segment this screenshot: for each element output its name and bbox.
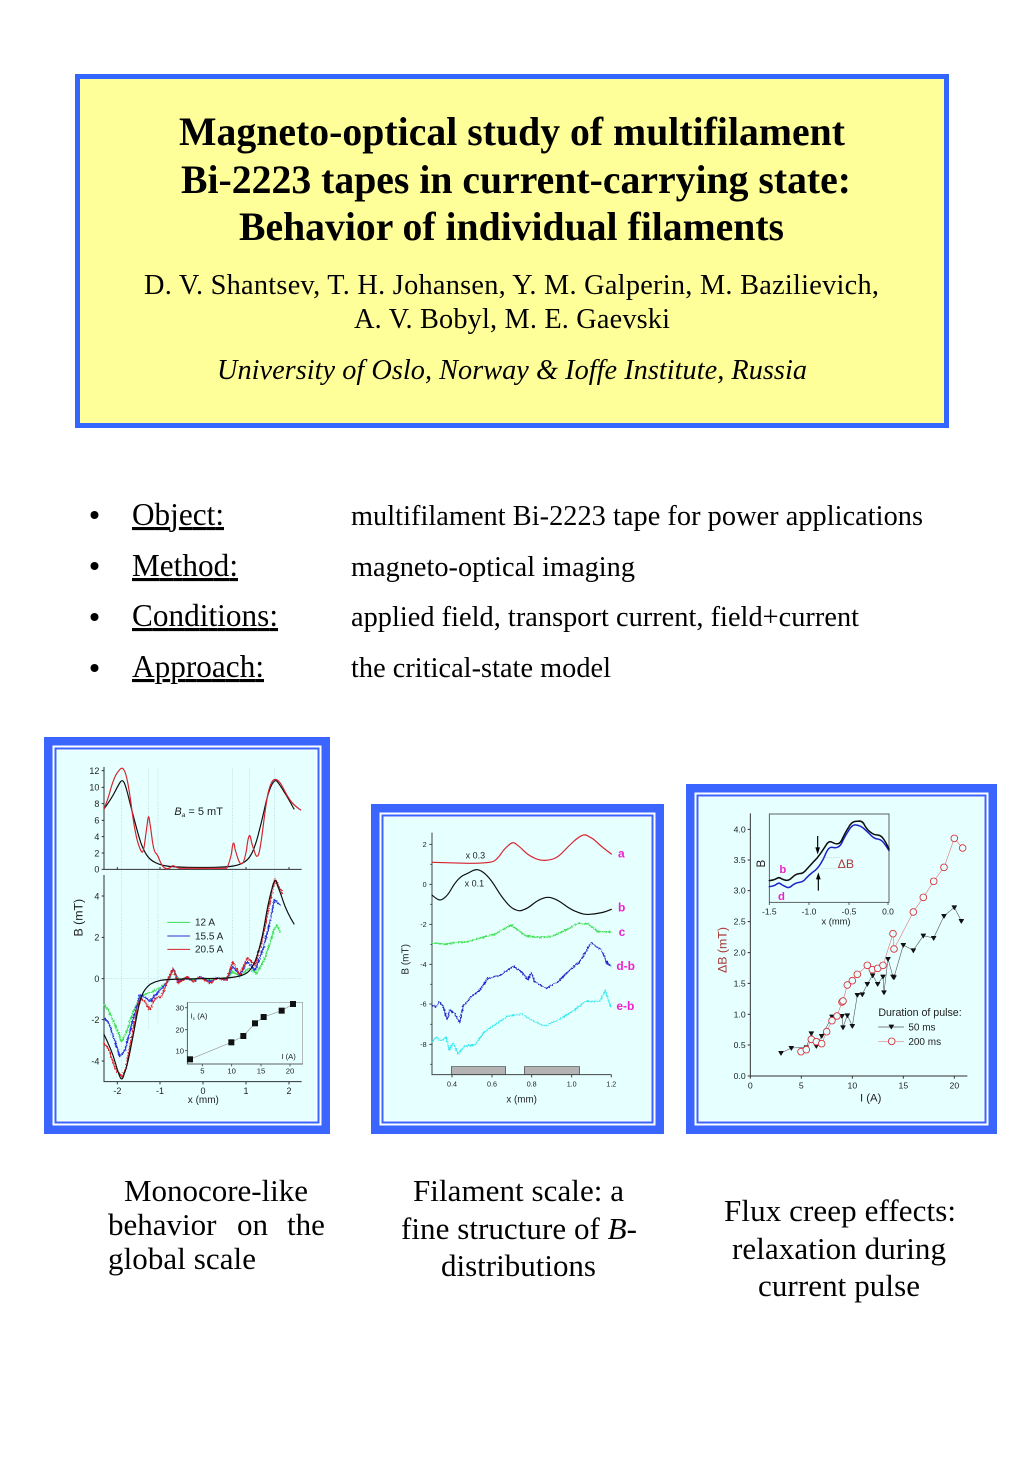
axis titles: x (mm): [506, 1094, 537, 1105]
chart: 15: [899, 1080, 908, 1090]
inset chart: 5: [200, 1066, 204, 1075]
title: [179, 110, 851, 249]
tick labels: 10: [89, 783, 99, 793]
applied field label: a: [182, 812, 186, 819]
scale labels: [465, 851, 485, 888]
legend: 12 A: [195, 918, 215, 929]
chart: 5: [799, 1080, 804, 1090]
inset chart: x (mm): [821, 916, 851, 926]
authors: D. V. Shantsev, T. H. Johansen, Y. M. Galperin, M. Bazilievich,: [144, 270, 879, 301]
top curves: [104, 768, 301, 869]
panel: flux creep chart: [686, 784, 997, 1134]
bullet: approach: the critical-state model: [351, 653, 611, 684]
bullet: object: [90, 497, 923, 532]
inset chart: -1.0: [802, 906, 817, 916]
title: Bi-2223 tapes in current-carrying state:: [181, 158, 851, 202]
curve c: [432, 923, 611, 944]
tick labels: -6: [420, 1001, 427, 1009]
guide lines: [104, 768, 302, 1082]
chart: 2: [286, 1086, 291, 1096]
tick labels: 0.5: [734, 1040, 746, 1050]
authors: [144, 270, 879, 335]
tick labels: 0: [94, 865, 99, 875]
tick labels: 2: [423, 841, 427, 849]
curve a: [432, 835, 611, 863]
bullet list: [90, 497, 923, 684]
caption: filament scale: distributions: [441, 1248, 596, 1283]
panel: global scale chart: [44, 737, 330, 1134]
axis titles: I (A): [860, 1092, 882, 1104]
inset chart: 10: [175, 1047, 184, 1056]
inset chart: [755, 814, 894, 926]
tick labels: 4.0: [734, 824, 746, 834]
tick labels: -8: [420, 1041, 427, 1049]
curve labels: e-b: [616, 999, 634, 1013]
bullet: method: magneto-optical imaging: [351, 552, 635, 583]
legend: [167, 918, 224, 956]
curve labels: b: [618, 900, 625, 914]
axes: [102, 767, 302, 1084]
tick labels: -2: [420, 921, 427, 929]
title box: [78, 76, 946, 426]
arrows: [815, 836, 821, 891]
scale labels: x 0.1: [465, 878, 484, 888]
tick labels: -4: [91, 1056, 99, 1066]
caption: monocore-like: [108, 1173, 325, 1276]
gray filament bars: [451, 1067, 580, 1075]
title: Magneto-optical study of multifilament: [179, 110, 846, 154]
panel frame: [371, 804, 664, 1134]
legend: 15.5 A: [195, 931, 224, 942]
inset chart: [175, 1001, 303, 1075]
tick labels: 3.0: [734, 886, 746, 896]
inset chart: B: [755, 860, 768, 868]
inset chart: I: [191, 1012, 193, 1021]
bullet: conditions: Conditions:: [132, 598, 278, 633]
authors: A. V. Bobyl, M. E. Gaevski: [354, 304, 670, 335]
tick labels: 1.5: [734, 978, 746, 988]
curve d-b: [432, 943, 611, 1023]
caption: flux creep: current pulse: [758, 1268, 920, 1303]
tick labels: 0.0: [734, 1071, 746, 1081]
inset chart: 0.0: [882, 906, 894, 916]
tick labels: 3.5: [734, 855, 746, 865]
caption: monocore-like: on: [237, 1207, 268, 1242]
panel: filament scale chart: [371, 804, 664, 1134]
tick labels: 2.0: [734, 948, 746, 958]
series: 50 ms: [779, 906, 964, 1055]
caption: monocore-like: Monocore-like: [124, 1173, 308, 1208]
tick labels: 2: [94, 848, 99, 858]
inset chart: d: [778, 891, 785, 903]
chart: -2: [113, 1086, 121, 1096]
caption: monocore-like: the: [287, 1207, 325, 1242]
chart: -1: [156, 1086, 164, 1096]
inset chart: 30: [175, 1004, 184, 1013]
legend: 200 ms: [908, 1037, 941, 1048]
caption: monocore-like: global scale: [108, 1241, 256, 1276]
bullet: conditions: [90, 598, 859, 633]
chart: 1.2: [606, 1080, 616, 1088]
title box background: [78, 76, 946, 426]
inset chart: 10: [227, 1066, 236, 1075]
chart: 20: [950, 1080, 959, 1090]
chart: [71, 766, 303, 1106]
caption: filament scale: fine structure of B-: [401, 1211, 637, 1246]
curve labels: [616, 847, 635, 1013]
chart: 0.6: [487, 1080, 497, 1088]
bullet: method: [90, 548, 635, 583]
legend: 20.5 A: [195, 945, 224, 956]
chart: [400, 833, 635, 1105]
tick labels: 12: [89, 766, 99, 776]
tick labels: 4: [94, 832, 99, 842]
curve labels: a: [618, 847, 625, 861]
inset chart: c: [193, 1016, 196, 1021]
tick labels: -2: [91, 1015, 99, 1025]
inset chart: (A): [195, 1012, 208, 1021]
tick labels: [89, 766, 99, 1066]
inset chart: -0.5: [842, 906, 857, 916]
caption: flux creep: Flux creep effects:: [724, 1193, 956, 1228]
chart: 0.8: [527, 1080, 537, 1088]
tick labels: 0: [423, 881, 427, 889]
caption: monocore-like: behavior: [108, 1207, 217, 1242]
applied field label: = 5 mT: [185, 806, 223, 818]
caption: filament scale: [401, 1173, 637, 1283]
inset chart: 15: [257, 1066, 265, 1075]
tick labels: 6: [94, 816, 99, 826]
chart: 0: [748, 1080, 753, 1090]
curve b: [432, 870, 611, 914]
axis titles: x (mm): [188, 1095, 219, 1106]
bullet: object: Object:: [132, 497, 224, 532]
inset chart: 20: [286, 1066, 294, 1075]
caption: filament scale: Filament scale: a: [413, 1173, 624, 1208]
axes: [748, 813, 967, 1079]
chart: 1: [243, 1086, 248, 1096]
tick labels: 4: [94, 891, 99, 901]
curve labels: d-b: [616, 959, 635, 973]
inset chart: 20: [175, 1026, 184, 1035]
tick labels: 1.0: [734, 1009, 746, 1019]
affiliation: University of Oslo, Norway & Ioffe Institute, Russia: [217, 355, 807, 386]
inset chart: -1.5: [762, 906, 777, 916]
caption: flux creep: [724, 1193, 956, 1303]
chart: [715, 813, 967, 1104]
bullet: approach: Approach:: [132, 649, 264, 684]
panel frame: [44, 737, 330, 1134]
bullet: conditions: applied field, transport current, field+current: [351, 602, 859, 633]
chart: 1.0: [567, 1080, 577, 1088]
inset chart: b: [779, 864, 786, 876]
tick labels: 2: [94, 933, 99, 943]
tick labels: 0: [94, 974, 99, 984]
curve e-b: [432, 991, 611, 1054]
tick labels: -4: [420, 961, 427, 969]
series: 200 ms: [798, 835, 966, 1055]
scale labels: x 0.3: [466, 851, 485, 861]
title: Behavior of individual filaments: [239, 205, 784, 249]
inset chart: I (A): [281, 1052, 296, 1061]
tick labels: [420, 841, 427, 1049]
axes: [429, 833, 611, 1077]
tick labels: [734, 824, 746, 1081]
chart: 10: [848, 1080, 857, 1090]
chart: 0.4: [447, 1080, 457, 1088]
legend: 50 ms: [908, 1022, 936, 1033]
applied field label: B: [174, 806, 182, 818]
curve labels: c: [619, 925, 626, 939]
chart: B (mT): [71, 899, 85, 937]
chart: 0: [200, 1086, 205, 1096]
bullet: method: Method:: [132, 548, 238, 583]
tick labels: 2.5: [734, 917, 746, 927]
lower curves: [104, 925, 280, 1042]
panel frame: [686, 784, 997, 1134]
caption: flux creep: relaxation during: [732, 1231, 946, 1266]
bullet: approach: [90, 649, 611, 684]
legend: [878, 1007, 962, 1048]
bullet: object: multifilament Bi-2223 tape for power applications: [351, 501, 923, 532]
inset chart: ΔB: [838, 857, 854, 871]
chart: ΔB (mT): [715, 927, 729, 973]
legend: Duration of pulse:: [878, 1007, 962, 1019]
tick labels: 8: [94, 799, 99, 809]
chart: B (mT): [400, 944, 411, 975]
